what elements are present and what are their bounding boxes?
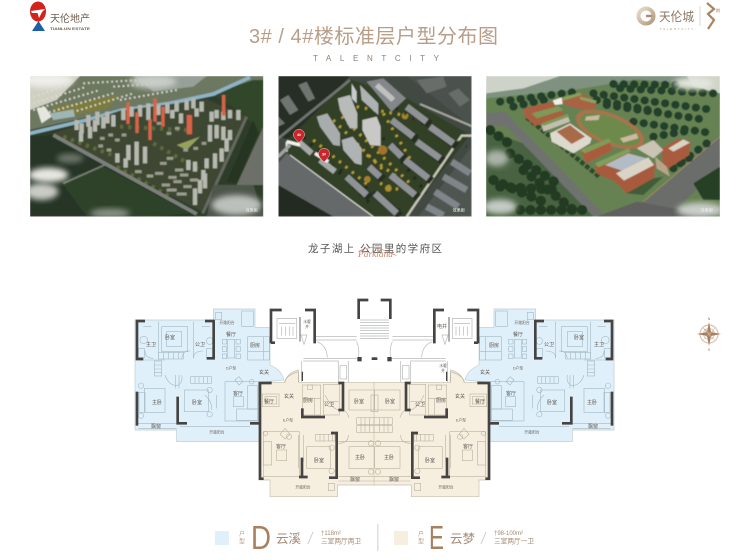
label: unit type vertical — [239, 530, 245, 546]
unit D: blue floor area — [135, 309, 284, 442]
logo: Tianlun Estate: 天伦地产 — [50, 12, 90, 25]
icon: compass — [697, 317, 721, 352]
logo: Tianlun Estate — [30, 2, 90, 31]
logo: Talent City: 天伦城 — [659, 9, 694, 24]
floor plan: room labels, right: 公卫 — [544, 342, 554, 348]
floor plan: room labels, right: 玄关 — [455, 393, 465, 400]
caption: photo one: 效果图 — [246, 206, 258, 212]
legend divider — [377, 524, 378, 551]
floor plan: room labels, right: 厨房 — [436, 397, 446, 404]
floor plan: room labels, left: 玄关 — [259, 369, 269, 376]
photo: school aerial rendering — [483, 76, 723, 217]
floor plan: room labels, right: 玄关 — [480, 369, 490, 376]
floor plan: room labels, right: 卧室 — [547, 399, 557, 406]
legend: unit E — [394, 519, 534, 556]
floor plan: room labels, right: 客厅 — [463, 443, 473, 450]
label: unit type vertical: 型 — [239, 538, 245, 546]
floor plan: room labels, left: 卧室 — [354, 398, 364, 405]
floor plan: room labels, right — [384, 320, 604, 490]
floor plan: room labels, right: 主卧 — [384, 454, 394, 461]
icon: building marker 3#: 3# — [322, 152, 326, 156]
floor plan: room labels, right: 卧室 — [574, 334, 584, 341]
floor plan: room labels, left: 开敞阳台 — [295, 484, 311, 490]
floor plan: room labels, right: 开敞阳台 — [514, 320, 530, 325]
letter D: D — [251, 519, 271, 556]
floor plan: room labels, left: 厨房 — [303, 397, 313, 404]
name: 云溪: 云溪 — [276, 532, 302, 546]
title: 3# / 4#楼标准层户型分布图 — [249, 25, 498, 48]
slogan: 龙子湖上 公园里的学府区 — [308, 242, 442, 255]
icon: compass: N — [708, 317, 711, 321]
unit E: furniture outlines — [262, 372, 375, 491]
floor plan: room labels, left: E户型 — [283, 418, 293, 422]
name: 云梦: 云梦 — [450, 532, 476, 546]
floor plan: room labels, left: 公卫 — [195, 342, 205, 348]
floor plan: room labels, left: 公卫 — [324, 402, 334, 408]
label: unit type vertical: 户 — [418, 530, 424, 538]
unit E: beige floor area — [259, 370, 375, 497]
caption: photo three: 效果图 — [701, 206, 713, 212]
photo: aerial view of the whole community — [20, 73, 263, 218]
floor plan: room labels, right: 开敞阳台 — [438, 484, 454, 490]
floor plan: left half geometry — [135, 300, 375, 497]
layout: E: 三室两厅一卫 — [494, 536, 534, 546]
logo: Talent City: TALENTCITY — [660, 27, 693, 31]
area: D: †118m² — [321, 531, 341, 537]
floor plan: room labels, left: 主卧 — [152, 399, 162, 406]
floor plan: room labels, right: 井 — [441, 368, 445, 373]
floor plan: room labels, right: 主卧 — [587, 399, 597, 406]
floor plan: room labels, left: 卧室 — [314, 457, 324, 464]
label: unit type vertical: 户 — [239, 530, 245, 538]
floor plan: room labels, right: 公卫 — [415, 402, 425, 408]
floor plan: room labels, left: 主卧 — [355, 454, 365, 461]
label: unit type vertical — [418, 530, 424, 546]
icon: building marker 3# — [318, 148, 330, 162]
floor plan: room labels, left: 水暖 — [303, 319, 311, 324]
layout: D: 三室两厅两卫 — [321, 536, 361, 546]
slash D — [308, 532, 313, 544]
floor plan: room labels, left: 餐厅 — [226, 331, 236, 338]
photo: community site plan rendering — [278, 76, 478, 217]
floor plan: room labels, left: 客厅 — [276, 443, 286, 450]
icon: building marker 4# — [293, 129, 305, 143]
floor plan: room labels, right: 飘窗 — [389, 476, 399, 483]
legend: unit D — [215, 519, 361, 556]
logo: Talent City — [638, 3, 720, 31]
label: unit type vertical: 型 — [418, 538, 424, 546]
logo: Talent City: 期 — [716, 7, 720, 13]
floor plan: room labels, left: 餐厅 — [264, 398, 274, 405]
floor plan: room labels, right: 餐厅 — [475, 398, 485, 405]
floor plan: room labels, right: 主卫 — [594, 341, 604, 348]
swatch: unit D colour — [215, 531, 229, 545]
floor plan: room labels, right: 卧室 — [385, 398, 395, 405]
logo: Tianlun Estate: TIANLUN ESTATE — [50, 26, 90, 31]
floor plan: room labels, left: 玄关 — [284, 393, 294, 400]
unit D: furniture outlines — [138, 311, 269, 428]
floor plan: room labels, left: 飘窗 — [151, 423, 161, 430]
floor plan: room labels, right: E户型 — [456, 418, 466, 422]
floor plan: room labels, left: 卧室 — [192, 399, 202, 406]
floor plan: room labels, left: 卧室 — [165, 334, 175, 341]
structural walls — [137, 300, 375, 480]
area: E: †98-100m² — [494, 531, 523, 537]
floor plan: room labels, right: 水暖 — [439, 363, 447, 368]
slash E — [481, 532, 486, 544]
slogan: Parkland — [357, 249, 394, 259]
floor plan: room labels, right: 卧室 — [425, 457, 435, 464]
icon: compass: S — [708, 348, 711, 352]
floor plan: room labels, left: 井 — [305, 324, 309, 329]
floor plan: room labels, right: D户型 — [513, 366, 523, 370]
core: corridor and shaft outlines — [277, 318, 375, 382]
floor plan: room labels, left: 厨房 — [250, 342, 260, 349]
stair column — [357, 357, 362, 361]
caption: photo two: 效果图 — [453, 206, 465, 212]
floor plan: room labels, left — [146, 319, 365, 490]
floor plan: room labels, left: 客厅 — [233, 390, 243, 397]
floor plan: room labels, right: 开敞阳台 — [524, 430, 540, 434]
floor plan: room labels, right: 厨房 — [489, 342, 499, 349]
floor plan: room labels, right: 飘窗 — [588, 423, 598, 430]
floor plan: room labels, right: 电井 — [437, 323, 447, 330]
floor plan: room labels, right: 餐厅 — [513, 331, 523, 338]
letter E: E — [429, 519, 444, 556]
floor plan: room labels, left: 飘窗 — [350, 476, 360, 483]
floor plan: room labels, right: 客厅 — [506, 390, 516, 397]
floor plan: mirrored right half geometry — [374, 300, 614, 497]
floor plan: room labels, left: 主卫 — [146, 341, 156, 348]
swatch: unit E colour — [394, 531, 408, 545]
floor plan: room labels, left: D户型 — [226, 366, 236, 370]
subtitle: TALENTCITY: TALENTCITY — [313, 54, 440, 63]
icon: building marker 4#: 4# — [297, 133, 301, 137]
floor plan: room labels, left: 开敞阳台 — [219, 320, 235, 325]
floor plan: room labels, left: 开敞阳台 — [209, 430, 225, 434]
